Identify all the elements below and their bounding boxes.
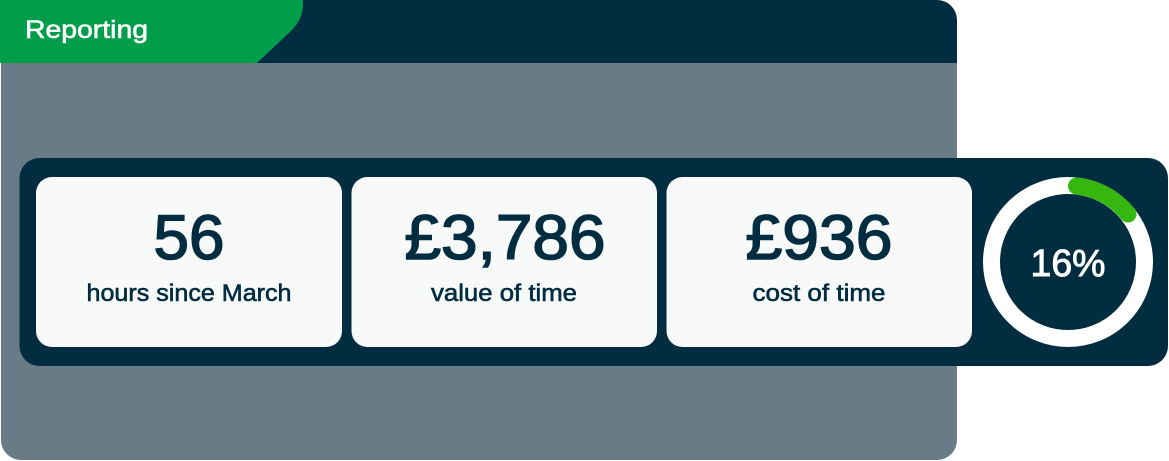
- card background: [36, 177, 342, 347]
- hours label: hours since March: [86, 280, 292, 307]
- ring track: [992, 186, 1144, 338]
- value label: value of time: [431, 280, 577, 307]
- heading: Reporting: [25, 16, 148, 44]
- panel: statistics bar: [20, 158, 1168, 366]
- card background: [352, 177, 657, 347]
- card: hours: [36, 177, 342, 347]
- value amount: £3,786: [404, 203, 606, 273]
- hours value: 56: [154, 203, 224, 273]
- tab shape: [0, 0, 303, 63]
- cost label: cost of time: [752, 280, 886, 307]
- cost amount: £936: [746, 203, 892, 273]
- panel: header bar: [1, 0, 957, 63]
- percentage: 16%: [1030, 243, 1106, 285]
- card background: [666, 177, 972, 347]
- ring progress arc: [1076, 186, 1128, 214]
- card: value: [352, 177, 657, 347]
- bar background: [20, 158, 1168, 366]
- progress ring: [992, 186, 1144, 338]
- card: cost: [666, 177, 972, 347]
- panel: background: [1, 63, 957, 460]
- header tab: [0, 0, 303, 63]
